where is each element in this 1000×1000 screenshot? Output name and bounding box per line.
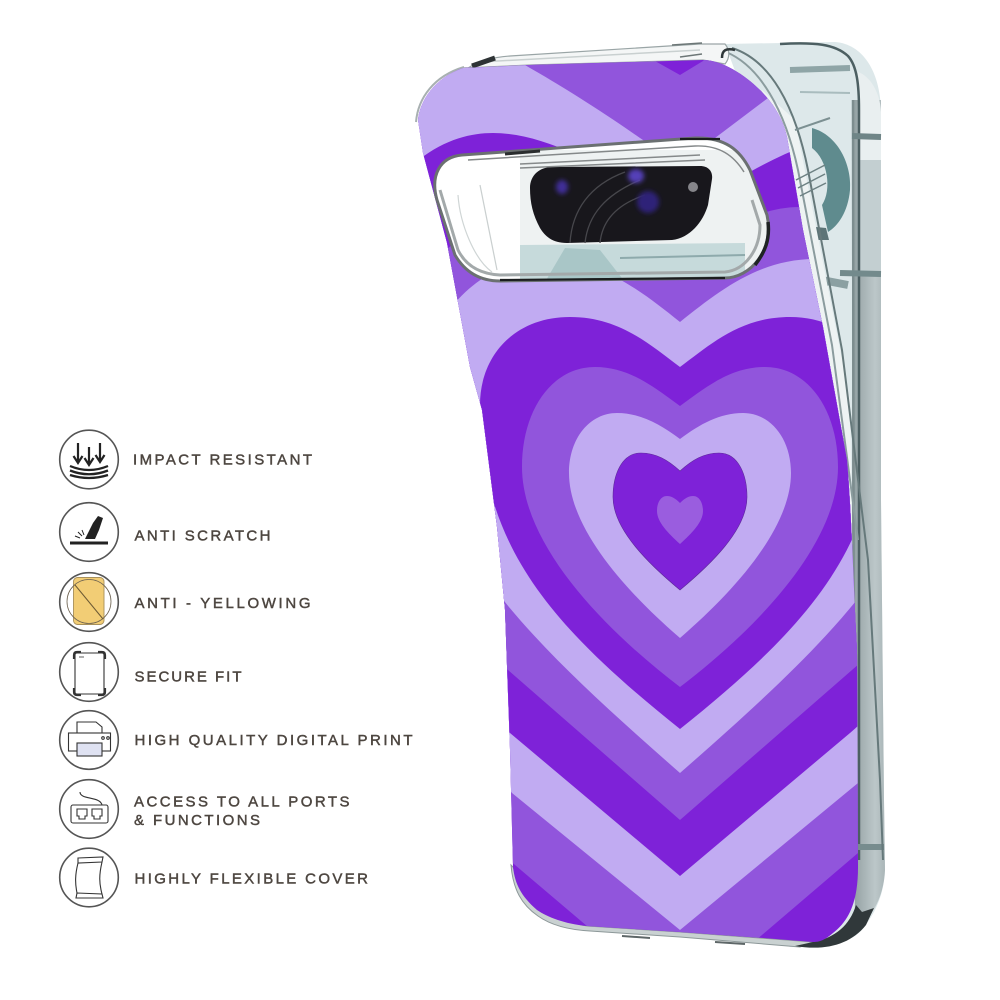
heart ring 6 xyxy=(448,207,857,820)
camera cutout xyxy=(435,138,770,285)
phone body behind case xyxy=(700,42,885,947)
heart ring 9 xyxy=(418,60,858,938)
label: anti yellowing: ANTI - YELLOWING xyxy=(134,595,310,612)
feature list xyxy=(60,430,412,907)
center heart xyxy=(657,496,703,544)
label: access to all ports and functions: ACCESS TO ALL PORTS xyxy=(134,794,350,810)
heart ring 2 xyxy=(569,413,791,638)
camera rim xyxy=(435,138,769,281)
label: secure fit: SECURE FIT xyxy=(134,668,242,686)
feature: impact resistant xyxy=(60,430,312,489)
case back with heart pattern xyxy=(418,60,858,942)
feature: access to all ports xyxy=(60,780,349,838)
transparent case edge xyxy=(416,43,883,948)
heart ring 5 xyxy=(458,259,854,773)
feature: anti yellowing xyxy=(60,573,311,631)
icon: blade scratching surface xyxy=(60,503,118,561)
top rim xyxy=(463,44,729,68)
icon: yellow case crossed out xyxy=(60,573,118,631)
phone mockup xyxy=(415,42,885,948)
heart ring 1 xyxy=(613,453,747,590)
icon: ports and cable xyxy=(60,780,118,838)
heart ring 7 xyxy=(424,133,858,876)
icon: phone with corner bumpers xyxy=(60,643,118,701)
label: high quality digital print: HIGH QUALITY DIGITAL PRINT xyxy=(134,732,412,749)
label: highly flexible cover: HIGHLY FLEXIBLE COVER xyxy=(134,870,368,888)
bottom rim xyxy=(511,865,813,947)
feature: highly flexible cover xyxy=(60,848,368,907)
icon: flexing cover xyxy=(60,848,118,907)
icon: printer xyxy=(60,711,118,769)
feature: anti scratch xyxy=(60,503,271,561)
heart ring 4 xyxy=(480,317,880,729)
feature: high quality digital print xyxy=(60,711,412,769)
label: impact resistant: IMPACT RESISTANT xyxy=(133,452,312,468)
heart ring 3 xyxy=(522,367,838,687)
heart ring 8 xyxy=(418,65,858,930)
label: access to all ports and functions: & FUNCTIONS xyxy=(134,812,260,829)
label: access to all ports and functions xyxy=(134,794,350,829)
label: anti scratch: ANTI SCRATCH xyxy=(134,528,270,544)
camera lens xyxy=(530,166,712,243)
feature: secure fit xyxy=(60,643,242,701)
icon: impact arrows xyxy=(60,430,118,489)
